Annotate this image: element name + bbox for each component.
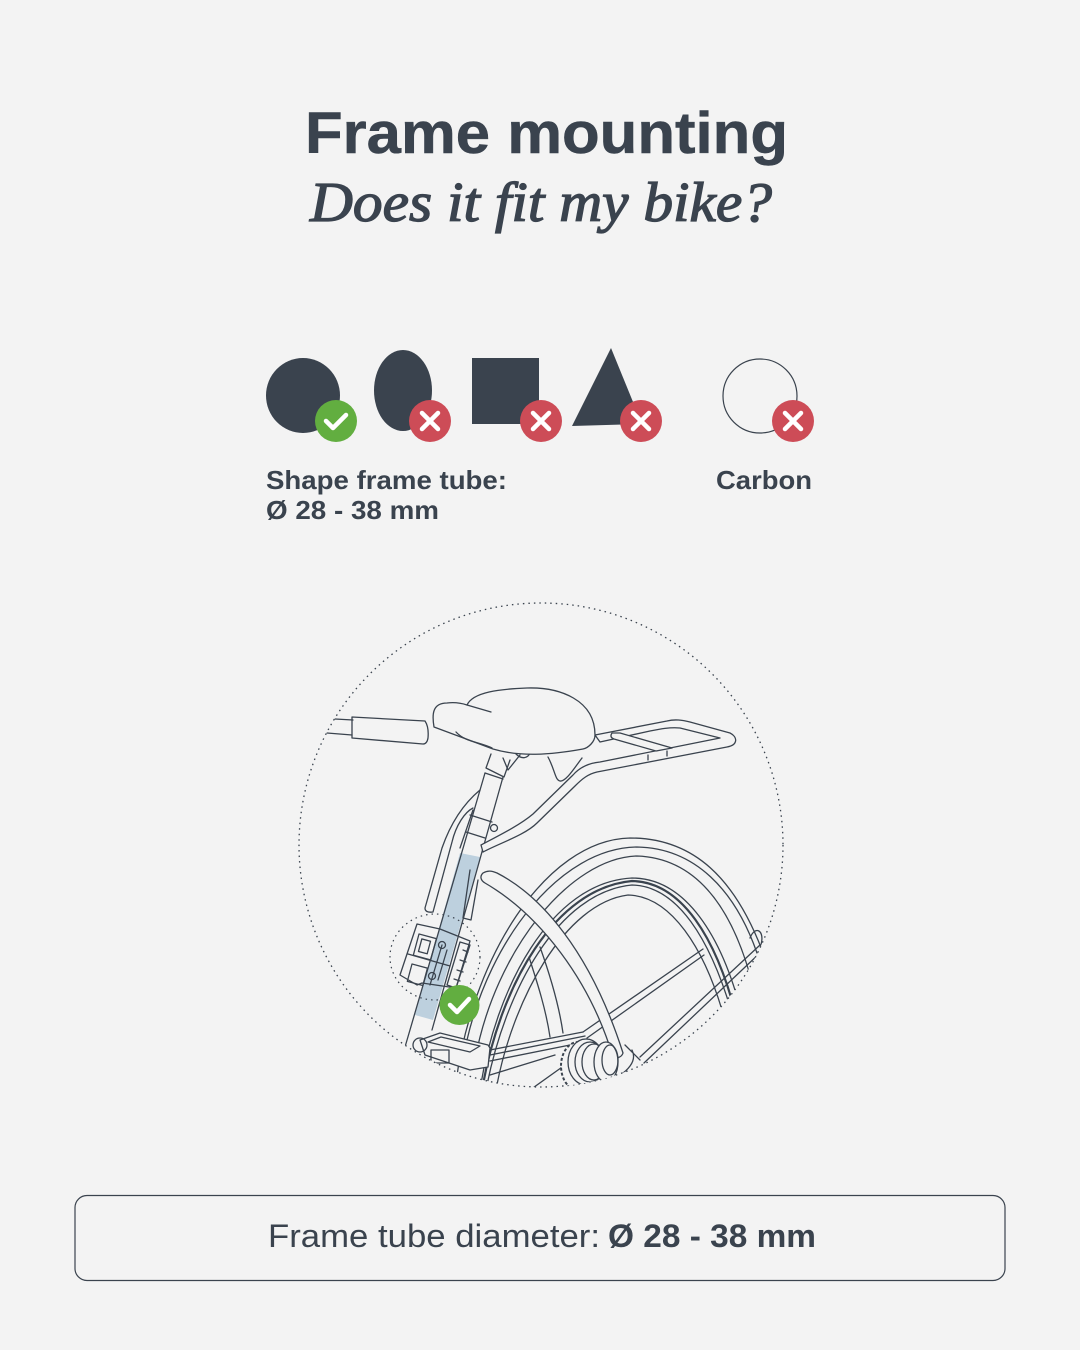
- label: shape frame tube: Ø 28 - 38 mm: [266, 495, 439, 525]
- icon: check badge: [440, 985, 480, 1025]
- dotted circle: [299, 603, 783, 1087]
- title: [305, 101, 788, 234]
- icon: carbon tube rejected: [723, 359, 814, 442]
- title: Does it fit my bike?: [309, 172, 772, 234]
- label: carbon: Carbon: [716, 465, 812, 495]
- seat tube and left stays: [405, 754, 510, 1047]
- label: shape frame tube: [266, 465, 507, 525]
- panel: tube shapes: [266, 348, 814, 525]
- label: shape frame tube: Shape frame tube:: [266, 465, 507, 495]
- saddle: [433, 688, 595, 754]
- icon: oval tube rejected: [374, 350, 451, 442]
- bike line drawing: [327, 688, 762, 1090]
- callout: frame tube diameter: Frame tube diameter:: [268, 1218, 600, 1254]
- mount detail: [390, 914, 480, 1000]
- callout: frame tube diameter: [75, 1196, 1005, 1280]
- grip: [327, 717, 428, 744]
- rack and stay: [481, 720, 736, 852]
- blue mounting zone: [415, 853, 480, 1020]
- diagonal tube: [481, 871, 623, 1058]
- title: Frame mounting: [305, 101, 788, 166]
- pedal: [413, 1033, 490, 1070]
- infographic canvas: [74, 110, 1006, 1282]
- drivetrain: [490, 1032, 640, 1090]
- icon: square tube rejected: [472, 358, 562, 442]
- wheel and fender: [455, 838, 762, 1090]
- icon: triangular tube rejected: [572, 348, 662, 442]
- callout: frame tube diameter: Ø 28 - 38 mm: [608, 1218, 816, 1254]
- icon: round tube accepted: [266, 358, 357, 442]
- illustration: bike rear with frame mount: [299, 603, 783, 1090]
